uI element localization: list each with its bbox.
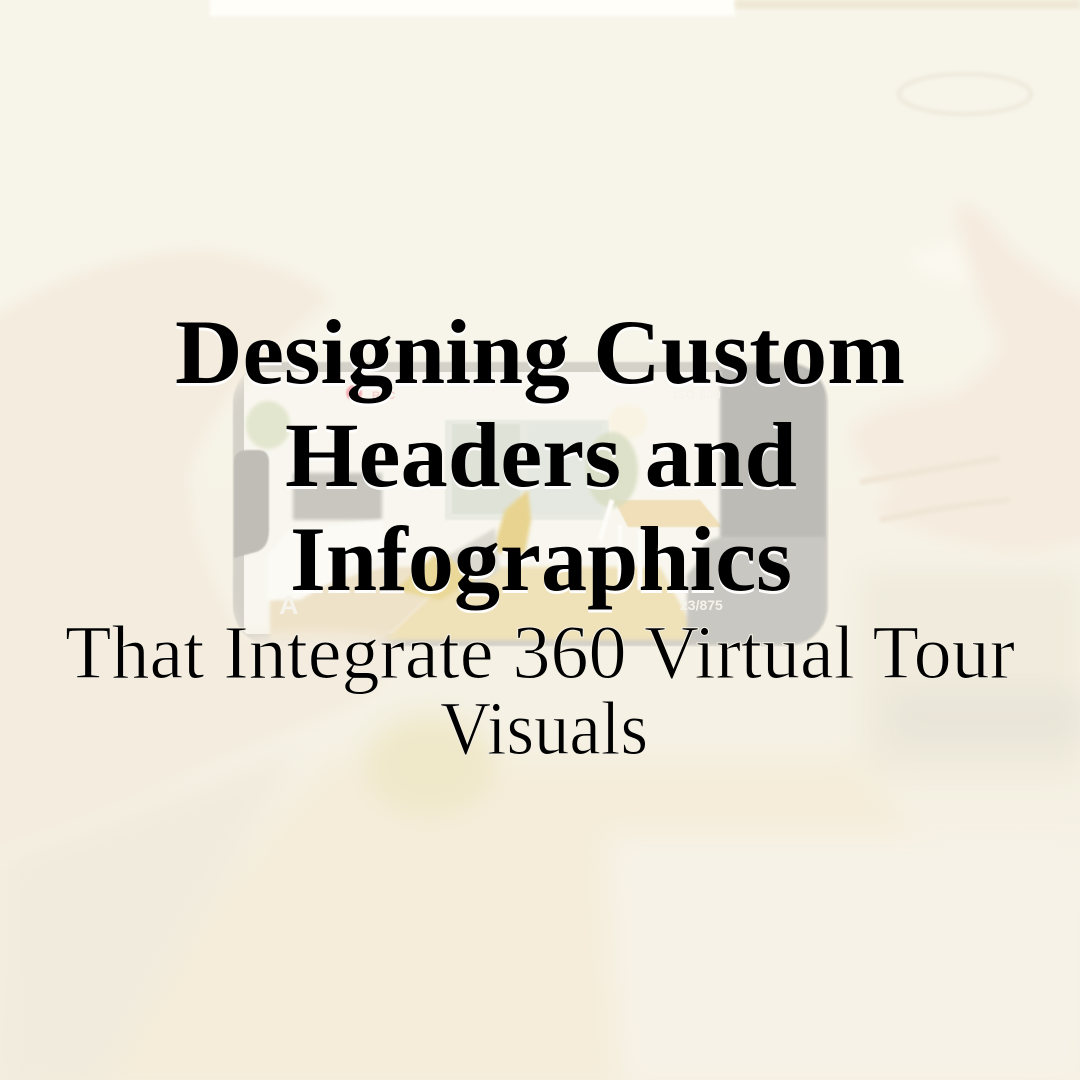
yellow chair bbox=[492, 490, 531, 553]
left hand bbox=[0, 250, 393, 850]
recording dot bbox=[346, 385, 362, 401]
label: A: A bbox=[279, 590, 298, 620]
title text: Headers and bbox=[285, 404, 797, 506]
phone body bbox=[233, 362, 828, 646]
label: REC: REC bbox=[372, 390, 395, 402]
tv bbox=[293, 473, 382, 520]
plants bbox=[586, 432, 638, 508]
right dark phone controls bbox=[720, 364, 826, 540]
title text: Infographics bbox=[290, 508, 792, 610]
title shadow: Headers and bbox=[285, 407, 797, 509]
title text: Designing Custom bbox=[175, 301, 905, 403]
dining table bbox=[614, 500, 722, 527]
title shadow: Designing Custom bbox=[175, 304, 905, 406]
title text bbox=[175, 301, 905, 610]
phone with room on screen bbox=[233, 362, 828, 646]
blurred hands framing the phone bbox=[0, 203, 1080, 850]
right hand bbox=[850, 203, 1080, 553]
tv stand bbox=[267, 520, 384, 600]
subtitle: Visuals bbox=[440, 687, 648, 771]
floor bbox=[384, 567, 700, 640]
chairs bbox=[600, 500, 640, 590]
label: ISO 800: ISO 800 bbox=[673, 387, 721, 402]
label: 23/875: 23/875 bbox=[680, 597, 723, 613]
window bbox=[445, 420, 609, 520]
lamp bbox=[610, 406, 646, 438]
phone screen scene bbox=[244, 364, 826, 644]
phone left notch bbox=[234, 450, 269, 558]
title shadow bbox=[175, 304, 905, 613]
title shadow: Infographics bbox=[290, 511, 792, 613]
subtitle: That Integrate 360 Virtual Tour bbox=[65, 611, 1015, 695]
title bbox=[175, 301, 905, 613]
subtitle bbox=[65, 611, 1015, 771]
